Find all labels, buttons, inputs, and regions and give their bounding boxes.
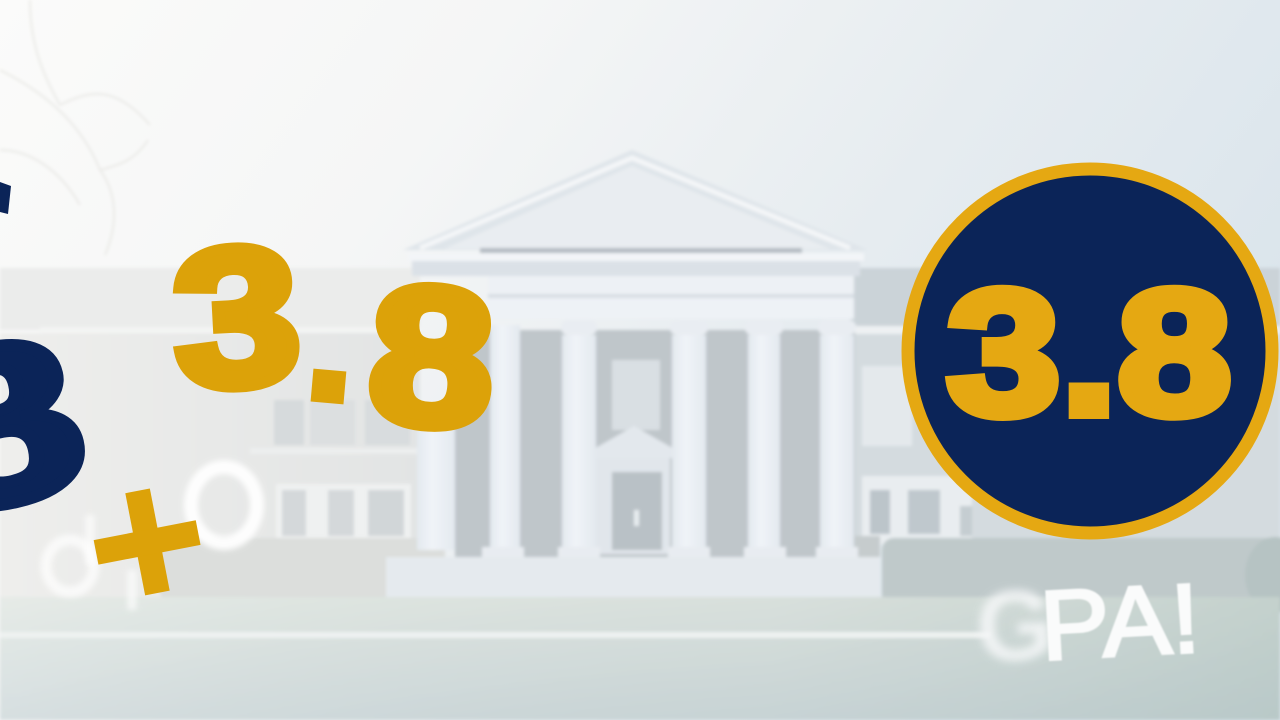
doorway	[592, 426, 676, 554]
GPA caption: PA!	[1037, 564, 1203, 681]
gold tilted 3.8	[168, 204, 499, 469]
pediment	[403, 150, 868, 253]
right wing	[820, 268, 1280, 613]
columns	[482, 320, 858, 557]
left wing	[0, 268, 445, 600]
entablature	[408, 253, 864, 319]
GPA badge	[908, 169, 1272, 533]
white ghost letters left	[46, 467, 257, 610]
gold tilted 3.8: 8	[364, 244, 499, 469]
portico wall	[455, 330, 855, 558]
steps	[386, 557, 880, 597]
wing column	[417, 425, 455, 550]
background building	[0, 150, 1280, 720]
GPA caption: G	[973, 568, 1057, 684]
background tree branches	[0, 0, 150, 255]
gold tilted 3.8: 3	[168, 204, 305, 429]
lawn	[0, 597, 1280, 720]
gold plus sign	[86, 481, 208, 603]
badge value: 3.8	[946, 253, 1232, 452]
